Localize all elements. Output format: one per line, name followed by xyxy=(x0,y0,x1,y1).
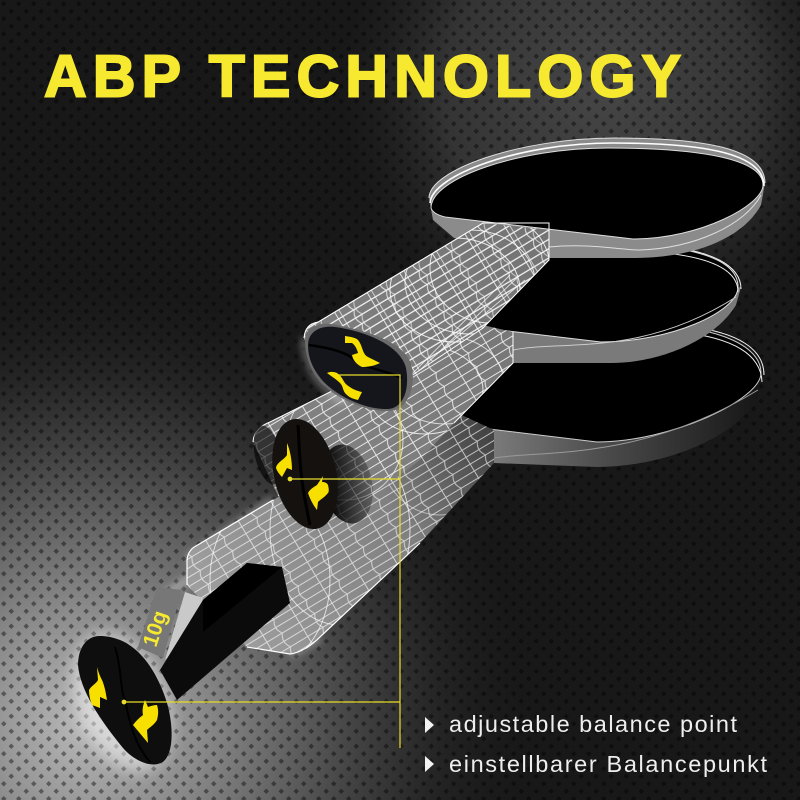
icon: yellow arrow lower xyxy=(327,372,362,400)
text: adjustable balance point: adjustable balance point xyxy=(449,711,737,737)
end cap 1: top handle xyxy=(305,324,413,411)
handle 3: wireframe tube xyxy=(186,415,494,655)
icon: yellow arrow lower xyxy=(133,700,158,743)
icon: yellow arrow upper xyxy=(89,667,107,708)
title: ABP TECHNOLOGY xyxy=(44,44,681,110)
handle 1: wireframe tube xyxy=(304,222,550,376)
icon: yellow arrow upper xyxy=(276,443,292,477)
icon: bullet triangle xyxy=(425,717,434,733)
end cap 3: exploded xyxy=(78,636,172,764)
middle cap assembly xyxy=(249,412,380,536)
handle 2: wireframe tube xyxy=(252,326,514,518)
paddle 2: middle position xyxy=(470,244,741,363)
icon: bullet triangle xyxy=(425,756,434,772)
balance point lines xyxy=(122,375,400,748)
glow around lower tube xyxy=(160,500,320,654)
paddle 3: bottom position xyxy=(445,325,764,467)
black weight bar xyxy=(160,563,290,700)
balance weight: 10g xyxy=(138,587,203,660)
label: 10g: 10g xyxy=(139,608,172,650)
icon: yellow arrow upper xyxy=(345,336,380,367)
glow behind caps xyxy=(54,338,345,785)
text: einstellbarer Balancepunkt: einstellbarer Balancepunkt xyxy=(449,751,767,777)
bullet list xyxy=(425,711,737,737)
icon: yellow arrow lower xyxy=(308,476,329,510)
paddle 1: top position xyxy=(429,138,765,258)
